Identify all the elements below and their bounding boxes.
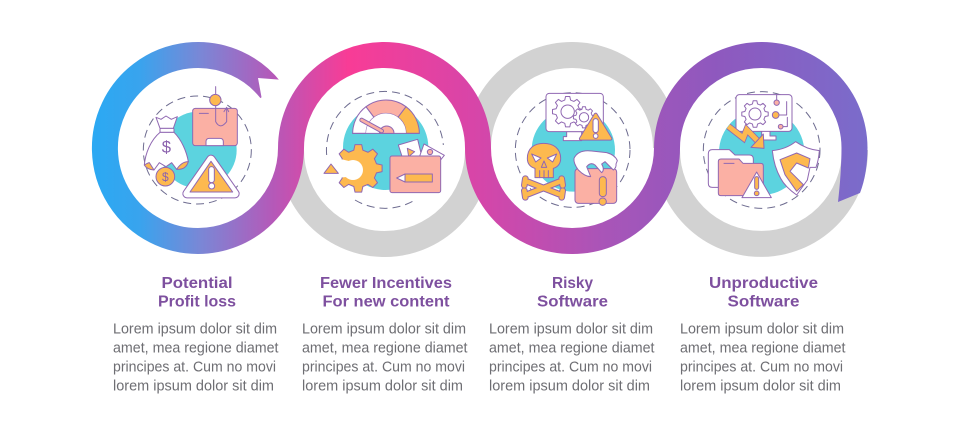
step 2: fewer incentives [302,91,468,395]
heading [709,275,818,310]
heading [537,275,608,310]
step 1: potential profit loss [113,87,278,394]
heading: For new content [322,294,450,310]
wave end tail [838,147,868,202]
body text: lorem ipsum dolor sit dim [680,378,841,394]
body text: principes at. Cum no movi [489,360,652,376]
heading: Fewer Incentives [320,275,452,292]
heading [320,275,452,310]
heading: Software [537,294,608,310]
icon: money bag, hooked folder and warning [143,87,251,204]
icon: money bag, hooked folder and warning: $ [162,170,169,184]
body text [680,322,846,394]
body text [489,322,654,394]
body text: lorem ipsum dolor sit dim [113,378,274,394]
body text: amet, mea regione diamet [489,340,654,356]
heading: Profit loss [158,294,236,310]
icon: monitor warning, skull and locked hand [515,93,630,207]
body text: amet, mea regione diamet [680,340,846,356]
heading: Unproductive [709,275,818,292]
icon: money bag, hooked folder and warning: $ [162,138,171,157]
gradient wave band [105,55,854,241]
step 3: risky software [489,93,654,394]
body text: principes at. Cum no movi [302,360,465,376]
body text: Lorem ipsum dolor sit dim [113,322,277,338]
body text: principes at. Cum no movi [680,360,843,376]
step 4: unproductive software [680,92,846,395]
body text: Lorem ipsum dolor sit dim [680,322,844,338]
arrow notch [258,78,284,100]
body text [113,322,278,394]
heading [158,275,236,310]
body text: lorem ipsum dolor sit dim [489,378,650,394]
heading: Risky [552,275,593,292]
body text: Lorem ipsum dolor sit dim [489,322,653,338]
body text: principes at. Cum no movi [113,360,276,376]
body text: Lorem ipsum dolor sit dim [302,322,466,338]
body text [302,322,468,394]
heading: Potential [162,275,232,292]
body text: lorem ipsum dolor sit dim [302,378,463,394]
heading: Software [728,294,800,310]
icon: gauge, gear and folder [324,91,444,208]
body text: amet, mea regione diamet [113,340,278,356]
icon: monitor, folder and broken shield [703,92,820,208]
grey wave arcs [291,55,855,244]
body text: amet, mea regione diamet [302,340,468,356]
ribbon: grey and gradient wave [105,55,867,244]
